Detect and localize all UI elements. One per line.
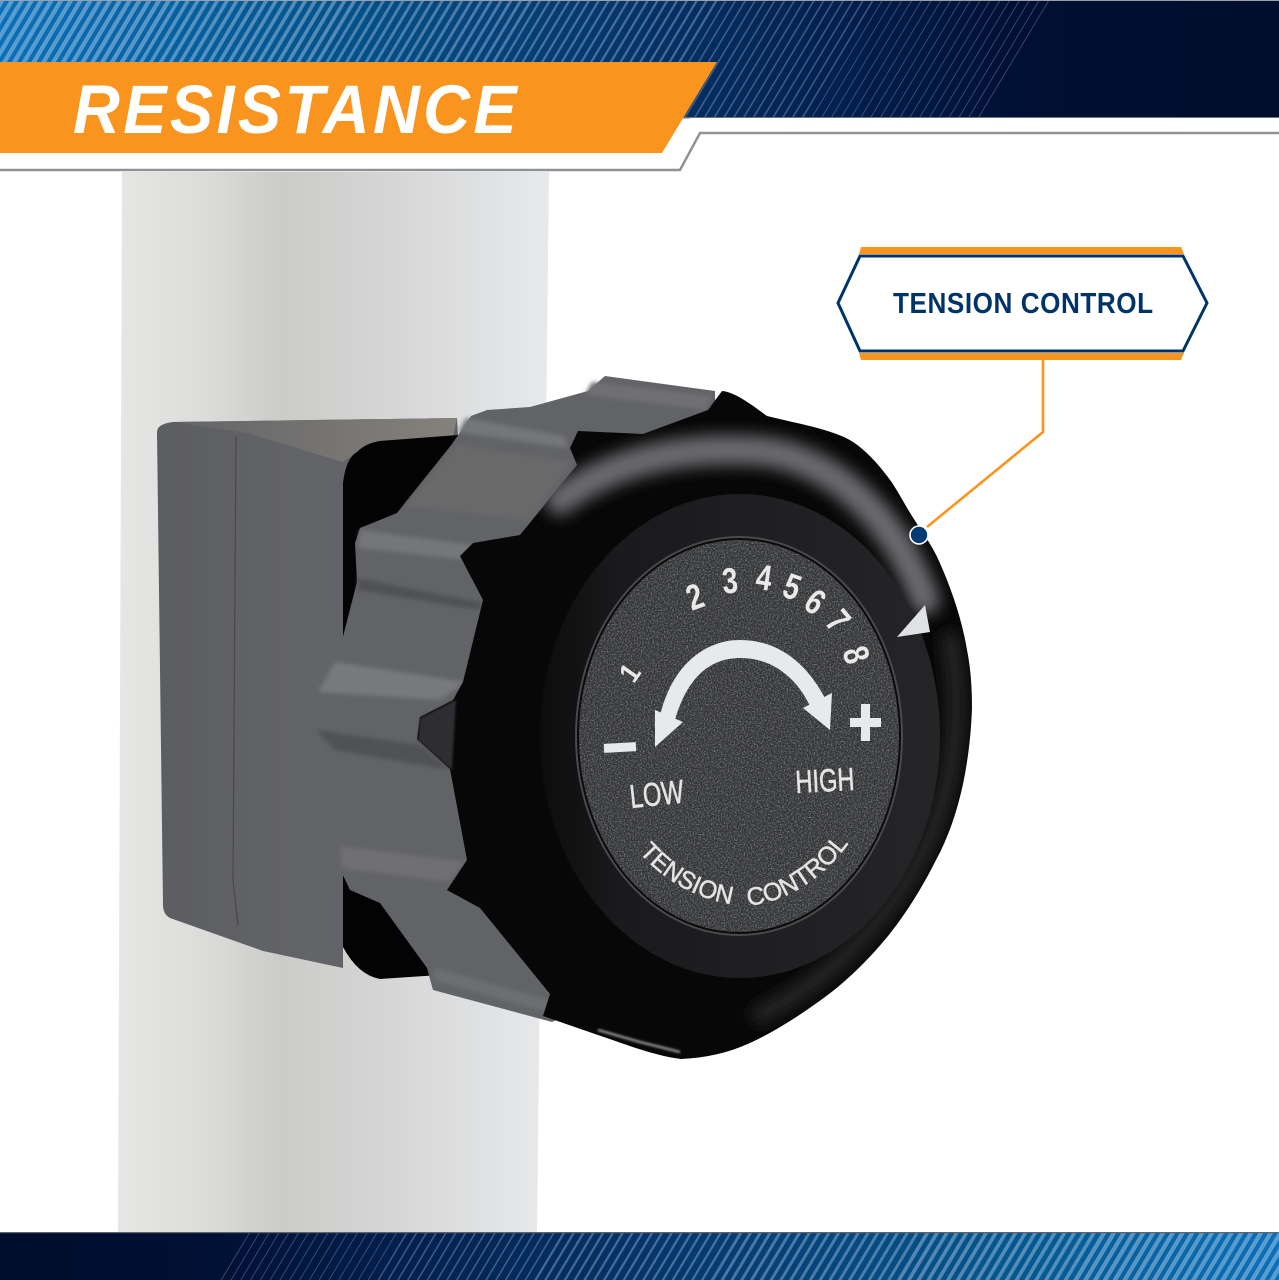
callout leader line [927, 360, 1043, 527]
low label: LOW [628, 772, 686, 815]
knob lower edge highlight [598, 1030, 680, 1052]
grip bump shadow [418, 700, 456, 770]
dial numbers: 1 [612, 658, 647, 688]
pole [118, 172, 549, 1232]
dial numbers: 8 [835, 641, 878, 669]
dial numbers: 5 [778, 565, 806, 608]
knob front ring [540, 494, 940, 978]
callout marker dot [910, 526, 928, 544]
dial numbers: 4 [754, 557, 775, 599]
header white cut and outline [0, 118, 1279, 170]
header band [0, 0, 1279, 118]
curved dial label: CONTROL [748, 840, 849, 905]
callout label [838, 247, 1207, 360]
curved dial label: TENSION [642, 840, 734, 904]
tension dial [575, 536, 903, 936]
dial numbers: 3 [720, 560, 740, 601]
callout text: TENSION CONTROL [893, 287, 1153, 319]
mounting bracket [157, 418, 480, 979]
resistance arc arrow [655, 640, 832, 747]
knob bevel shading [560, 450, 956, 1015]
plus sign [850, 704, 881, 741]
minus sign [604, 742, 636, 753]
footer band [0, 1232, 1279, 1280]
indicator triangle [897, 605, 930, 637]
title text: RESISTANCE [73, 71, 519, 148]
dial numbers: 2 [681, 575, 709, 618]
dial texture [577, 537, 901, 935]
knob grip [313, 376, 720, 1022]
high label: HIGH [794, 761, 855, 800]
dial numbers: 7 [818, 602, 859, 640]
curved dial label [642, 840, 849, 905]
title banner [0, 62, 717, 153]
knob body [417, 391, 972, 1059]
dial numbers [612, 557, 878, 688]
dial numbers: 6 [797, 581, 833, 623]
